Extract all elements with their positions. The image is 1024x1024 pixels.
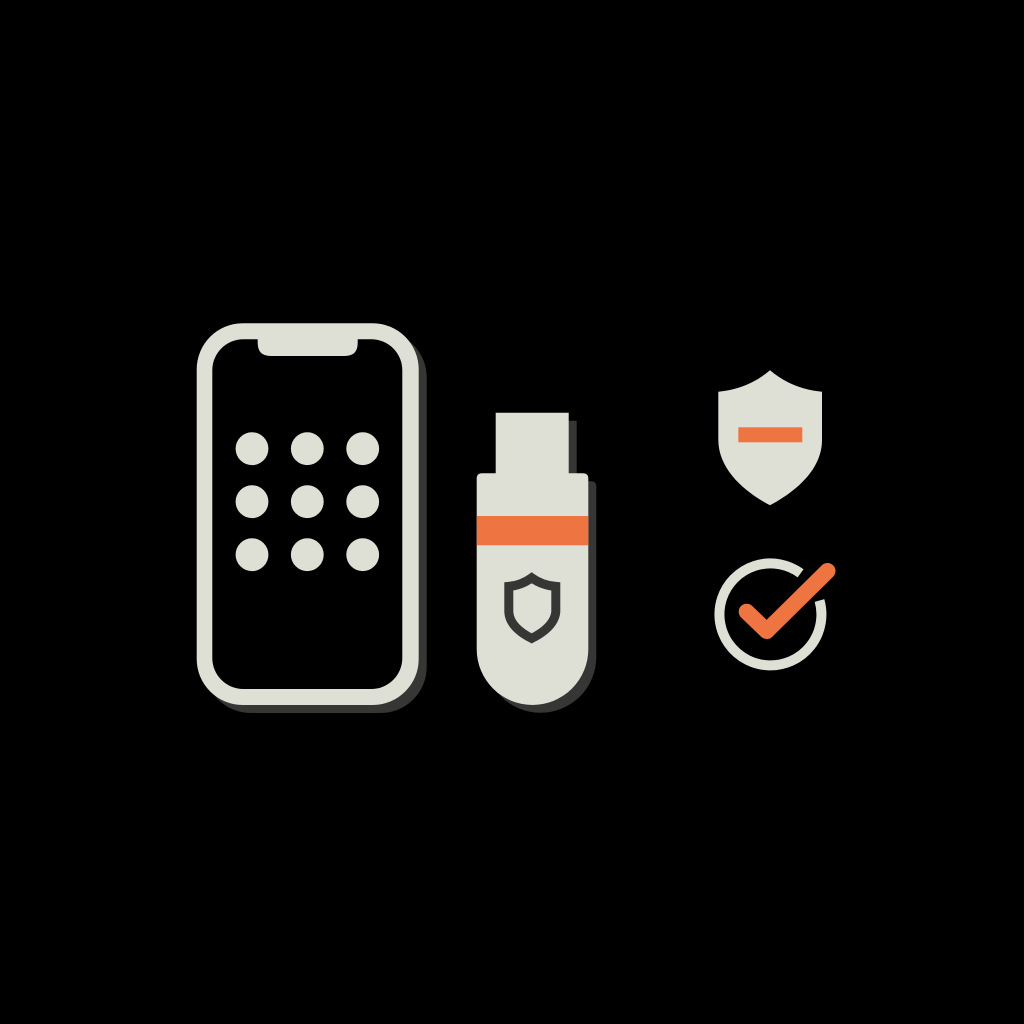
circle outline bbox=[719, 563, 821, 665]
phone notch bbox=[258, 338, 358, 356]
shield minus bar bbox=[738, 427, 802, 442]
USB shield emblem bbox=[509, 578, 556, 638]
keypad dots bbox=[236, 432, 379, 571]
phone screen bbox=[212, 339, 402, 689]
USB connector and body bbox=[477, 413, 588, 705]
icon: smartphone with keypad bbox=[197, 323, 427, 713]
USB orange stripe bbox=[477, 516, 588, 545]
icon: check mark in circle bbox=[719, 563, 828, 665]
icon: USB security key bbox=[477, 413, 596, 713]
phone frame bbox=[197, 323, 419, 705]
icon: shield with minus bbox=[718, 370, 822, 505]
orange check mark bbox=[747, 571, 828, 631]
shield body bbox=[718, 370, 822, 505]
USB shadow bbox=[485, 421, 596, 713]
phone shadow bbox=[205, 331, 427, 713]
